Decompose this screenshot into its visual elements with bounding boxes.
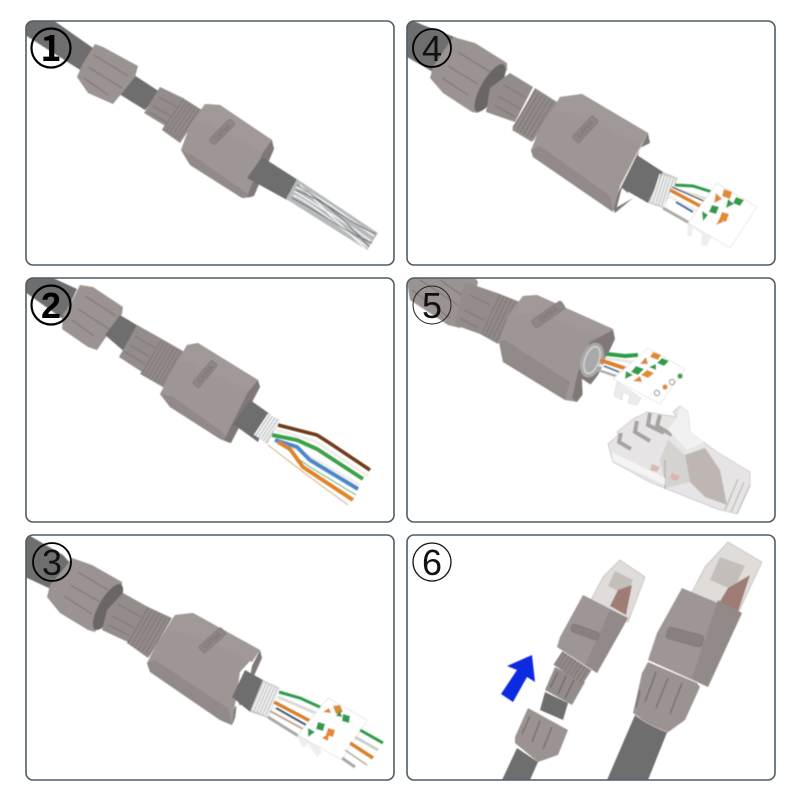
panel: step 1 strip cable jacket	[20, 10, 394, 265]
arrow: push direction	[501, 655, 535, 702]
icon: assembled plug right	[607, 542, 762, 780]
badge: number 1	[32, 20, 70, 72]
badge: number 6	[413, 542, 451, 583]
illustration: exploded and assembled plugs	[501, 542, 762, 780]
illustration: connector with block above clear RJ45 plug	[405, 270, 750, 514]
label: embossed tag: CAT6A	[196, 364, 215, 385]
label: embossed tag: CAT6A	[213, 123, 233, 143]
label: embossed tag: CAT6A	[202, 631, 223, 650]
illustration: connector on cable with fanned twisted wires	[20, 272, 370, 505]
badge: number 4	[413, 28, 451, 69]
badge: number 4: 4	[422, 28, 442, 69]
label: embossed tag	[198, 627, 226, 654]
panel: step 6 assemble finished plug	[407, 535, 775, 780]
panel: step 5 press block and RJ45 plug	[405, 270, 775, 522]
icon: block colour code marks	[625, 352, 669, 382]
badge: number 3	[33, 542, 71, 583]
label: embossed tag	[531, 300, 566, 328]
label: embossed tag	[572, 115, 599, 143]
panel: step 3 thread wires through termination block	[20, 530, 394, 780]
icon: block colour code marks	[308, 705, 350, 741]
label: embossed tag: CAT6A	[576, 119, 596, 140]
icon: clear RJ45 plug	[608, 406, 750, 514]
illustration: connector with wires passing through block	[20, 530, 383, 767]
illustration: connector with trimmed wires in block	[400, 15, 757, 248]
badge: number 2	[32, 285, 70, 326]
illustration: connector on cable with jacket and exposed shield braid	[20, 10, 378, 250]
badge: number 5	[413, 285, 451, 326]
badge: number 6: 6	[422, 542, 442, 583]
badge: number 2: 2	[41, 285, 61, 326]
badge: number 1: 1	[40, 20, 62, 72]
icon: assembly plug left	[502, 560, 645, 780]
label: embossed tag	[192, 360, 218, 388]
icon: block colour code marks	[702, 189, 744, 225]
label: embossed tag: CAT6A	[538, 306, 560, 324]
badge: number 3: 3	[42, 542, 62, 583]
icon: block wire holes	[654, 373, 683, 396]
icon: shield ring	[580, 342, 604, 378]
panel: step 4 seat block on trimmed wires	[400, 15, 775, 265]
badge: number 5: 5	[422, 285, 442, 326]
icon: connector opening	[572, 330, 615, 402]
panel: step 2 fan out wires	[20, 272, 394, 522]
label: embossed tag	[209, 119, 235, 145]
